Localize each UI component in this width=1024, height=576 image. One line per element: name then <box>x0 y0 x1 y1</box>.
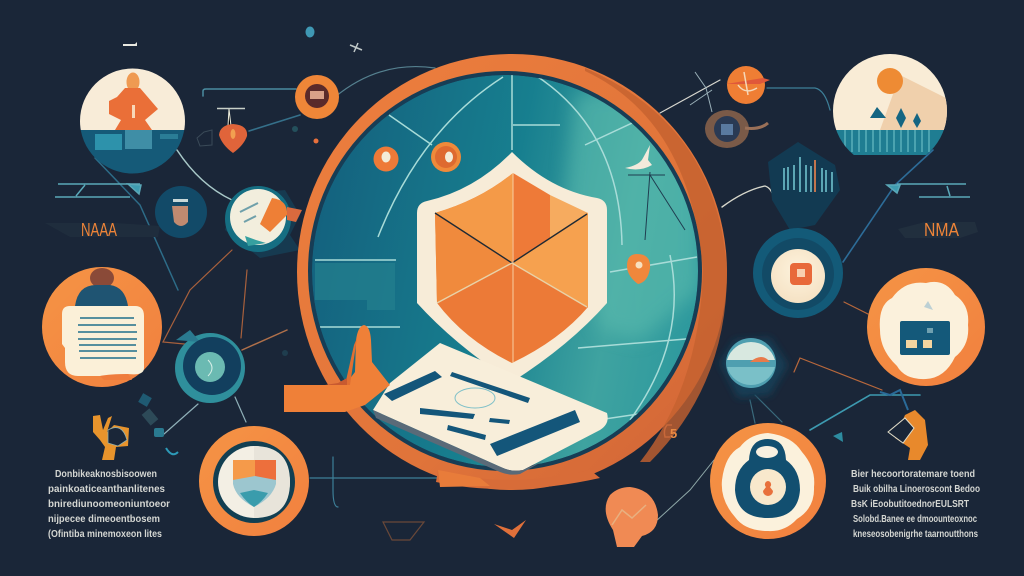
small icon: number tag: 5 <box>670 426 677 441</box>
dark hexagon bar chart <box>768 142 840 230</box>
orange circle: document <box>42 267 162 387</box>
text block right: Buik obilha Linoeroscont Bedoo <box>853 483 980 495</box>
orange small badge top right <box>726 66 770 104</box>
bottom orange bulb icon <box>606 487 658 547</box>
dome icon: arrows top right <box>830 50 950 155</box>
shield medallion <box>199 426 309 536</box>
decorative dots and nodes left <box>138 350 288 454</box>
document on globe <box>373 343 608 475</box>
label: NMA right: NMA <box>924 220 959 240</box>
gear figure right <box>833 390 928 460</box>
connector lines <box>95 67 933 522</box>
pins on globe <box>374 142 650 284</box>
orange badge top <box>295 75 339 119</box>
lock medallion <box>710 423 826 539</box>
text block right: kneseosobenigrhe taarnoutthons <box>853 528 978 540</box>
dome icon: person top left <box>80 60 185 175</box>
pin icon: heart <box>197 108 247 153</box>
globe icon left <box>225 186 302 258</box>
small icon: number tag <box>664 425 677 441</box>
orange circle: card <box>867 268 985 386</box>
small top icons <box>123 26 362 144</box>
ring lower overlay <box>436 470 600 489</box>
text block left: Donbikeaknosbisoowen <box>55 468 157 480</box>
text block left: bnirediunoomeoniuntoeor <box>48 498 170 510</box>
small bottom markers <box>383 520 526 540</box>
glass orb <box>720 338 788 398</box>
text block left <box>48 468 170 540</box>
teal ring icon right <box>753 228 843 318</box>
label: NAAA left <box>45 220 160 240</box>
text block left: painkoaticeanthanlitenes <box>48 483 165 495</box>
text block left: (Ofintiba minemoxeon lites <box>48 528 162 540</box>
spiral badge <box>690 72 768 148</box>
label: NMA right <box>898 220 978 240</box>
hand pointing <box>284 325 390 412</box>
text block right: Solobd.Banee ee dmoounteoxnoc <box>853 513 977 525</box>
right header lines <box>887 184 970 197</box>
text block left: nijpecee dimeoentbosem <box>48 513 160 525</box>
gear figure left <box>93 415 129 460</box>
text block right: Bier hecoortoratemare toend <box>851 468 975 480</box>
label: NAAA left: NAAA <box>81 220 117 240</box>
left header lines <box>55 184 141 197</box>
ring shading right <box>585 68 727 462</box>
text block right: BsK iEoobutitoednorEULSRT <box>851 498 969 510</box>
teal lens icon <box>175 330 245 403</box>
central shield <box>417 152 607 382</box>
text block right <box>851 468 980 540</box>
dark shield badge left <box>155 186 207 238</box>
main globe ring <box>297 54 727 490</box>
globe body <box>312 75 700 467</box>
